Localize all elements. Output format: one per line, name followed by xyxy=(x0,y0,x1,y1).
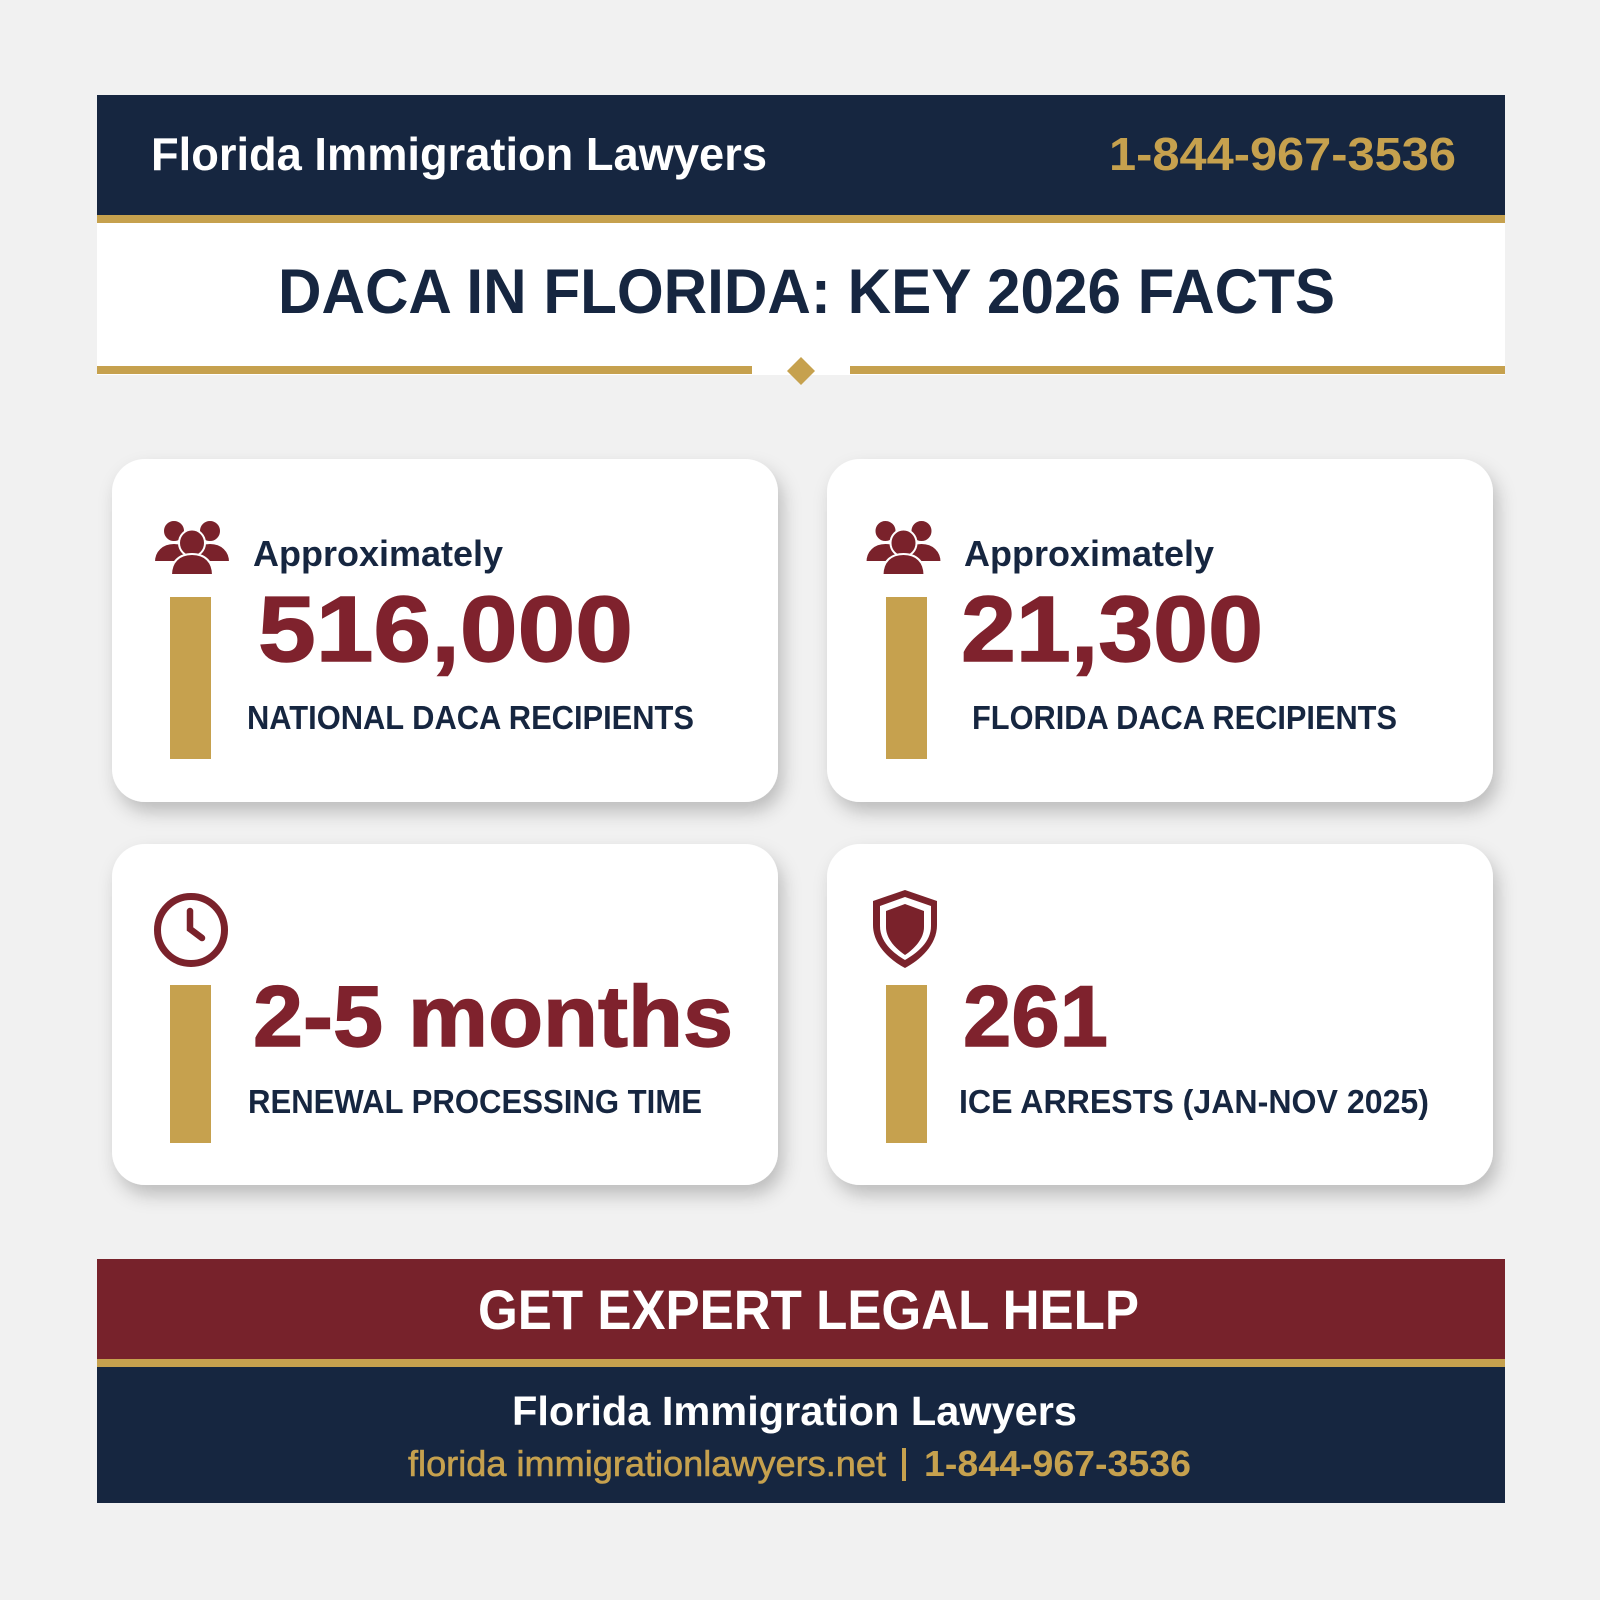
icon: clock xyxy=(158,896,224,964)
stat: 2-5 months xyxy=(253,969,733,1065)
footer phone: 1-844-967-3536 xyxy=(924,1443,1191,1484)
title panel xyxy=(97,223,1505,385)
stat label: ICE ARRESTS (JAN-NOV 2025) xyxy=(959,1083,1429,1120)
stat: 516,000 xyxy=(258,577,633,681)
footer divider xyxy=(902,1448,906,1481)
icon: people xyxy=(866,520,942,575)
cta heading: GET EXPERT LEGAL HELP xyxy=(478,1278,1139,1341)
lead-in text: Approximately xyxy=(253,533,503,574)
firm name: Florida Immigration Lawyers xyxy=(151,128,767,180)
card: ice arrests xyxy=(827,844,1493,1185)
stat label: NATIONAL DACA RECIPIENTS xyxy=(247,699,694,736)
stat: 261 xyxy=(963,969,1108,1065)
card: processing time xyxy=(112,844,778,1185)
gold bar xyxy=(886,985,927,1143)
footer firm name: Florida Immigration Lawyers xyxy=(512,1388,1077,1434)
stat label: FLORIDA DACA RECIPIENTS xyxy=(972,699,1397,736)
footer call to action xyxy=(97,1259,1505,1503)
gold bar xyxy=(170,985,211,1143)
card: florida recipients xyxy=(827,459,1493,802)
gold bar xyxy=(170,597,211,759)
stat label: RENEWAL PROCESSING TIME xyxy=(248,1083,702,1120)
diamond ornament xyxy=(787,357,815,385)
icon: people xyxy=(154,520,230,575)
lead-in text: Approximately xyxy=(964,533,1214,574)
stat: 21,300 xyxy=(961,577,1263,681)
phone number: 1-844-967-3536 xyxy=(1109,128,1456,180)
footer website: florida immigrationlawyers.net xyxy=(408,1443,886,1484)
header bar xyxy=(97,95,1505,223)
card: national recipients xyxy=(112,459,778,802)
title: DACA IN FLORIDA: KEY 2026 FACTS xyxy=(278,257,1335,327)
gold bar xyxy=(886,597,927,759)
icon: shield xyxy=(873,890,937,968)
